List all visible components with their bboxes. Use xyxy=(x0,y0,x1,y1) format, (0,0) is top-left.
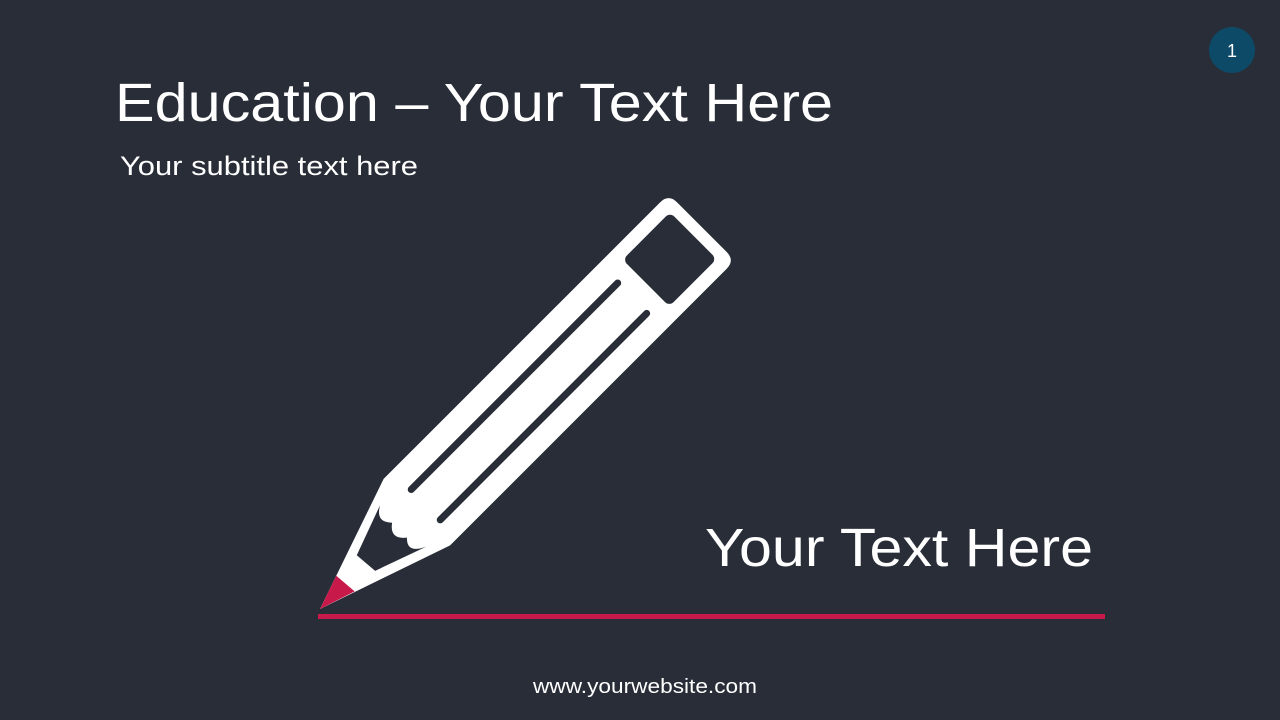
title: Education – Your Text Here xyxy=(115,73,833,133)
icon: pencil xyxy=(287,194,735,642)
footer website: www.yourwebsite.com xyxy=(532,676,757,698)
underline xyxy=(318,614,1105,619)
text: Your Text Here: Your Text Here xyxy=(705,518,1093,578)
page number badge xyxy=(1209,27,1255,73)
subtitle: Your subtitle text here xyxy=(120,151,418,181)
page number badge: 1 xyxy=(1227,41,1237,61)
